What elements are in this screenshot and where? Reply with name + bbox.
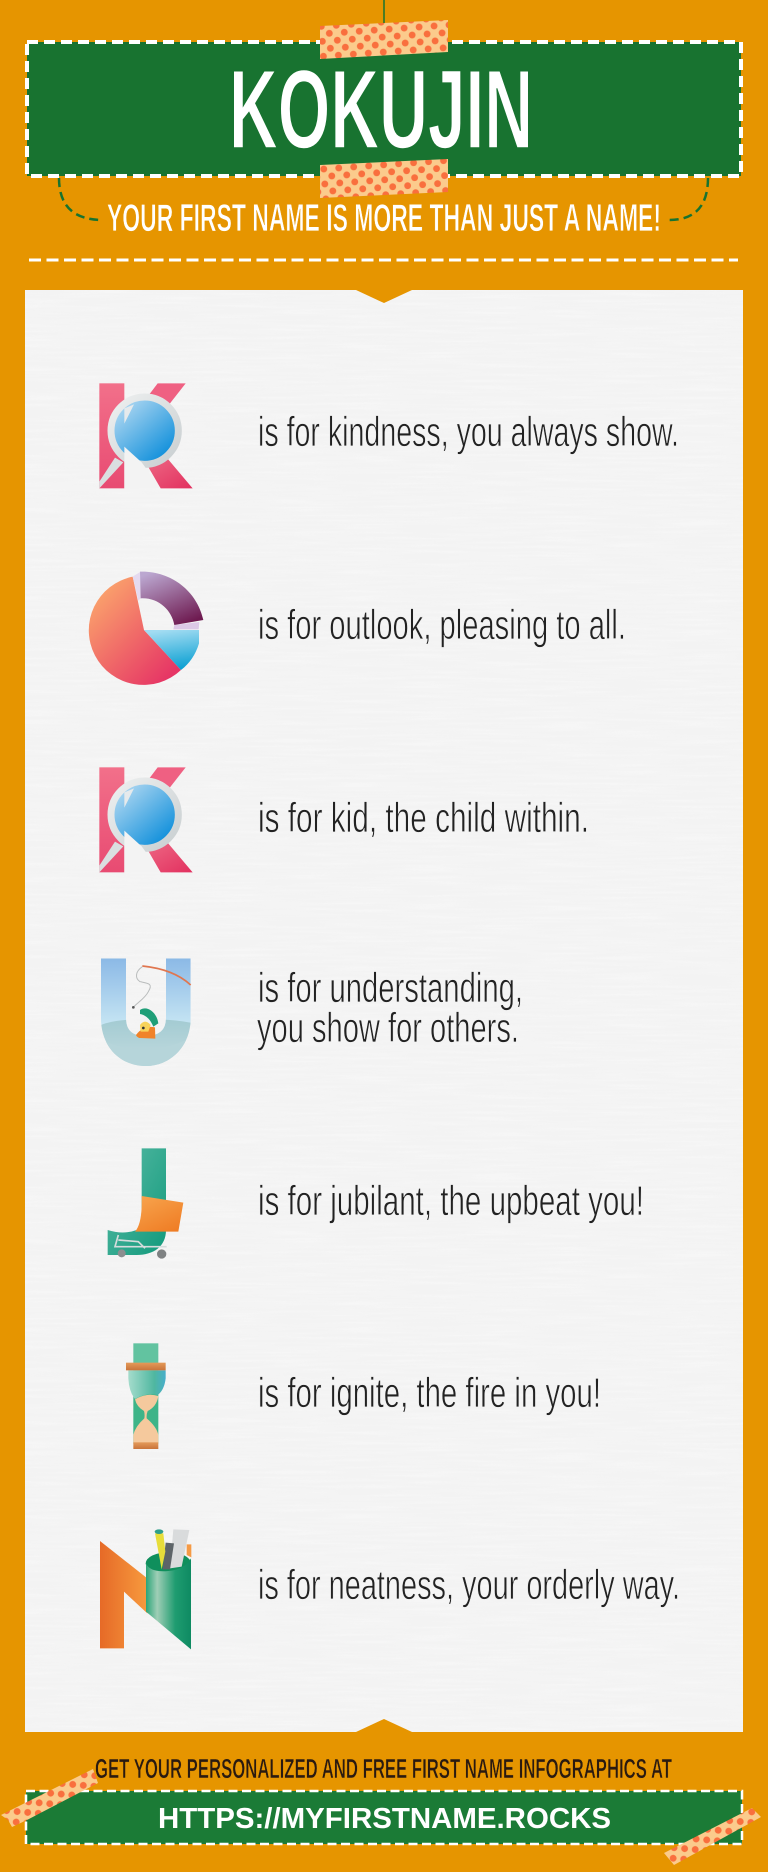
- text: line 2: you show for others.: [257, 1004, 519, 1051]
- icon: N with pencil cup: [100, 1529, 191, 1649]
- row O: outlook: [89, 572, 626, 685]
- main panel: [25, 290, 743, 1732]
- row K: kid: [99, 767, 589, 872]
- icon: I hourglass: [126, 1343, 166, 1449]
- icon: J with shopping cart: [108, 1148, 183, 1259]
- icon: U with fisherman: [101, 958, 191, 1067]
- icon: O pie chart: [89, 572, 203, 685]
- left bracket: [59, 178, 103, 220]
- title: name: KOKUJIN: [229, 47, 533, 172]
- footer url: HTTPS://MYFIRSTNAME.ROCKS: [158, 1803, 611, 1835]
- right bracket: [669, 178, 708, 220]
- footer banner: [26, 1791, 742, 1844]
- text: is for ignite, the fire in you!: [258, 1369, 601, 1416]
- hanging string: [383, 0, 385, 24]
- footer tape left: [1, 1769, 98, 1827]
- row K: kindness: [99, 383, 679, 488]
- row I: ignite: [126, 1343, 601, 1449]
- text: is for kid, the child within.: [258, 794, 589, 841]
- row N: neatness: [100, 1529, 680, 1649]
- dashed rule: [29, 258, 738, 262]
- icon: K with magnifying glass: [99, 767, 193, 872]
- icon: K with magnifying glass: [99, 383, 193, 488]
- row J: jubilant: [108, 1148, 644, 1259]
- text: line 1: is for understanding,: [258, 964, 523, 1011]
- title banner: [27, 42, 741, 176]
- row U: understanding: [101, 958, 523, 1067]
- footer tape right: [664, 1808, 761, 1865]
- top washi tape: [320, 20, 448, 59]
- lower washi tape: [320, 159, 448, 198]
